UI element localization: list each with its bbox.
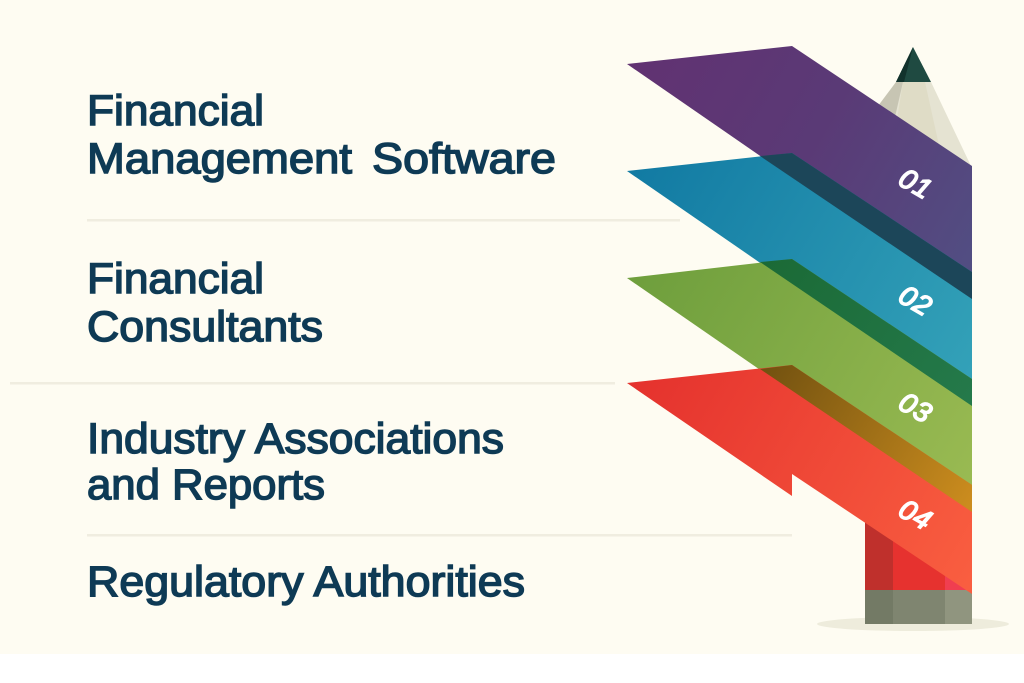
heading: Industry Associations and Reports: Industry Associations xyxy=(87,415,504,463)
pencil body xyxy=(865,515,972,591)
pencil illustration xyxy=(817,47,1009,631)
ribbon 04 red arrow xyxy=(627,365,972,594)
pencil shadow xyxy=(817,617,1009,631)
pencil ferrule xyxy=(865,590,972,624)
heading: Industry Associations and Reports: and Reports xyxy=(87,461,325,509)
heading: Financial Consultants: Consultants xyxy=(87,303,323,351)
heading: Financial Consultants: Financial xyxy=(87,255,264,303)
ribbon 03 green xyxy=(627,259,972,516)
overlap blue and green xyxy=(760,259,972,406)
number 01: 01 xyxy=(894,162,938,205)
divider lines xyxy=(10,219,792,536)
heading: Financial Management Software: Management xyxy=(87,135,352,183)
heading: Financial Management Software: Software xyxy=(372,135,556,183)
number 03: 03 xyxy=(894,386,938,429)
pencil tip wood xyxy=(855,82,971,166)
overlap green and red xyxy=(760,365,972,512)
pencil lead xyxy=(896,47,931,82)
ribbon 02 blue xyxy=(627,153,972,409)
number 04: 04 xyxy=(894,493,938,536)
heading: Financial Management Software xyxy=(87,87,556,183)
heading: Financial Consultants xyxy=(87,255,323,351)
heading: Financial Management Software: Financial xyxy=(87,87,264,135)
number 02: 02 xyxy=(894,279,938,322)
overlap purple and blue xyxy=(760,153,972,299)
heading: Industry Associations and Reports xyxy=(87,415,504,509)
ribbon 01 purple xyxy=(627,46,972,302)
heading: Regulatory Authorities: Regulatory Authorities xyxy=(87,558,525,606)
